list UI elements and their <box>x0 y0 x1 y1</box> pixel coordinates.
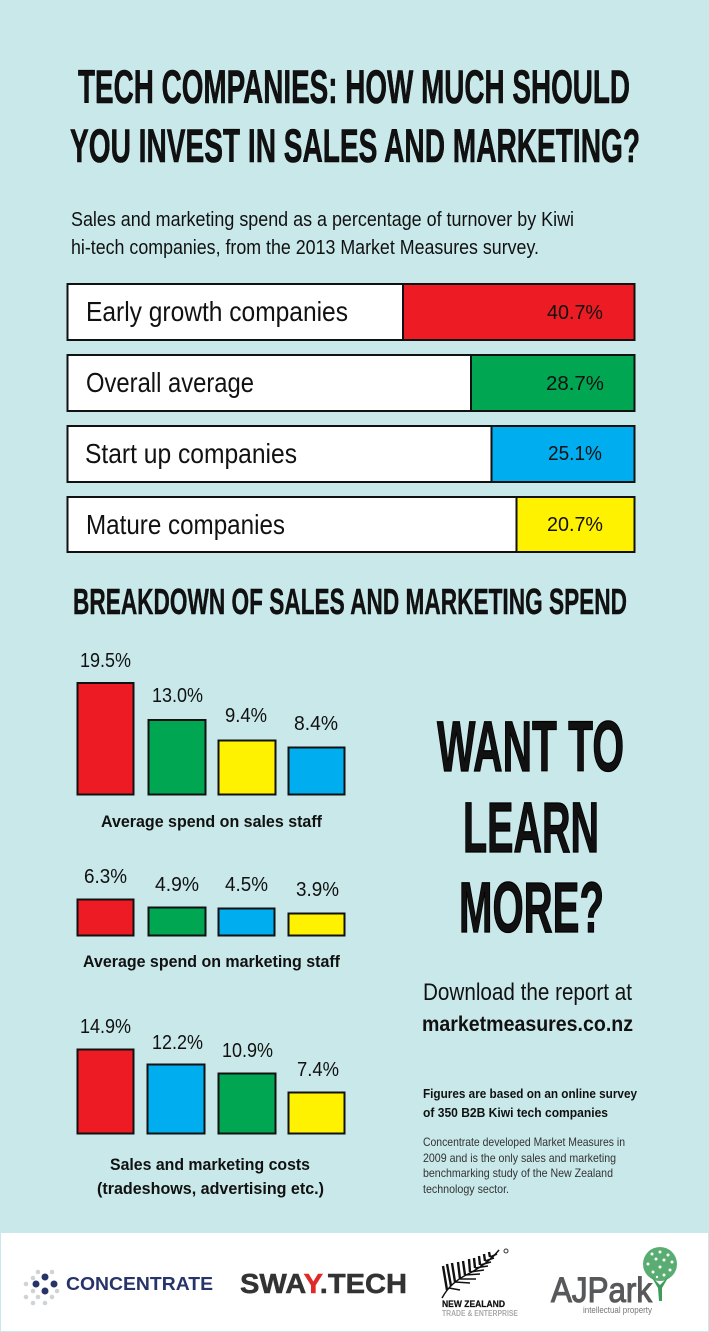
chart: sales and marketing costs: 14.9% <box>80 1016 131 1038</box>
chart: sales and marketing costs: 7.4% <box>297 1059 339 1081</box>
logo: New Zealand Trade & Enterprise <box>442 1249 519 1318</box>
chart: sales staff: 19.5% <box>80 650 131 672</box>
chart: marketing staff: 4.5% <box>225 874 268 896</box>
chart: sales and marketing costs: (tradeshows, advertising etc.) <box>97 1179 324 1198</box>
bar: early growth companies: Early growth companies <box>86 296 348 327</box>
chart: marketing staff: Average spend on marketing staff <box>83 952 340 971</box>
intro text <box>71 209 574 259</box>
logo: Concentrate <box>24 1270 213 1305</box>
about text: technology sector. <box>423 1182 509 1196</box>
logo strip <box>1 1233 708 1331</box>
bar: overall average: Overall average <box>86 367 254 398</box>
logo: Sway.Tech: SWAY.TECH <box>240 1268 407 1299</box>
chart: sales and marketing costs: 12.2% <box>152 1032 203 1054</box>
bar: early growth companies <box>68 284 634 340</box>
about text: Concentrate developed Market Measures in <box>423 1135 625 1149</box>
logo: Concentrate: CONCENTRATE <box>66 1273 213 1294</box>
chart: sales staff: 13.0% <box>152 685 203 707</box>
chart: sales staff: 8.4% <box>294 713 338 735</box>
bar: overall average <box>68 355 634 411</box>
bar: overall average: 28.7% <box>546 373 604 395</box>
survey note: of 350 B2B Kiwi tech companies <box>423 1105 608 1120</box>
chart: marketing staff: 3.9% <box>296 879 339 901</box>
logo: New Zealand Trade & Enterprise: NEW ZEALAND <box>442 1299 505 1310</box>
intro text: Sales and marketing spend as a percentage of turnover by Kiwi <box>71 209 574 231</box>
intro text: hi-tech companies, from the 2013 Market Measures survey. <box>71 237 539 259</box>
bar: mature companies: 20.7% <box>547 514 603 536</box>
chart: sales staff: 9.4% <box>225 705 267 727</box>
call to action heading: MORE? <box>459 869 604 948</box>
bar: start up companies: 25.1% <box>548 443 602 465</box>
ranking bars <box>68 284 634 552</box>
chart: sales staff <box>78 650 344 831</box>
survey note: Figures are based on an online survey <box>423 1086 638 1101</box>
call to action heading <box>437 708 624 948</box>
logo: AJ Park: AJPark <box>551 1271 652 1310</box>
bar: mature companies: Mature companies <box>86 509 285 540</box>
download text <box>422 979 633 1036</box>
bar: mature companies <box>68 497 634 552</box>
call to action heading: LEARN <box>463 789 599 868</box>
chart: sales and marketing costs: Sales and marketing costs <box>110 1155 310 1174</box>
chart: marketing staff: 4.9% <box>155 874 199 896</box>
about text: 2009 and is the only sales and marketing <box>423 1151 616 1165</box>
logo: AJ Park <box>551 1247 677 1315</box>
chart: sales staff: Average spend on sales staff <box>101 812 322 831</box>
chart: marketing staff <box>78 866 344 971</box>
download text: marketmeasures.co.nz <box>422 1013 633 1036</box>
download text: Download the report at <box>423 979 632 1006</box>
logo: AJ Park: intellectual property <box>583 1305 652 1315</box>
about text <box>423 1135 625 1196</box>
about text: benchmarking study of the New Zealand <box>423 1166 613 1180</box>
survey note <box>423 1086 638 1120</box>
bar: start up companies: Start up companies <box>85 438 297 469</box>
title <box>70 60 640 172</box>
bar: early growth companies: 40.7% <box>547 302 603 324</box>
chart: marketing staff: 6.3% <box>84 866 127 888</box>
chart: sales and marketing costs: 10.9% <box>222 1040 273 1062</box>
chart: sales and marketing costs <box>78 1016 344 1198</box>
bar: start up companies <box>68 426 634 482</box>
logo: New Zealand Trade & Enterprise: TRADE & ENTERPRISE <box>442 1309 519 1318</box>
